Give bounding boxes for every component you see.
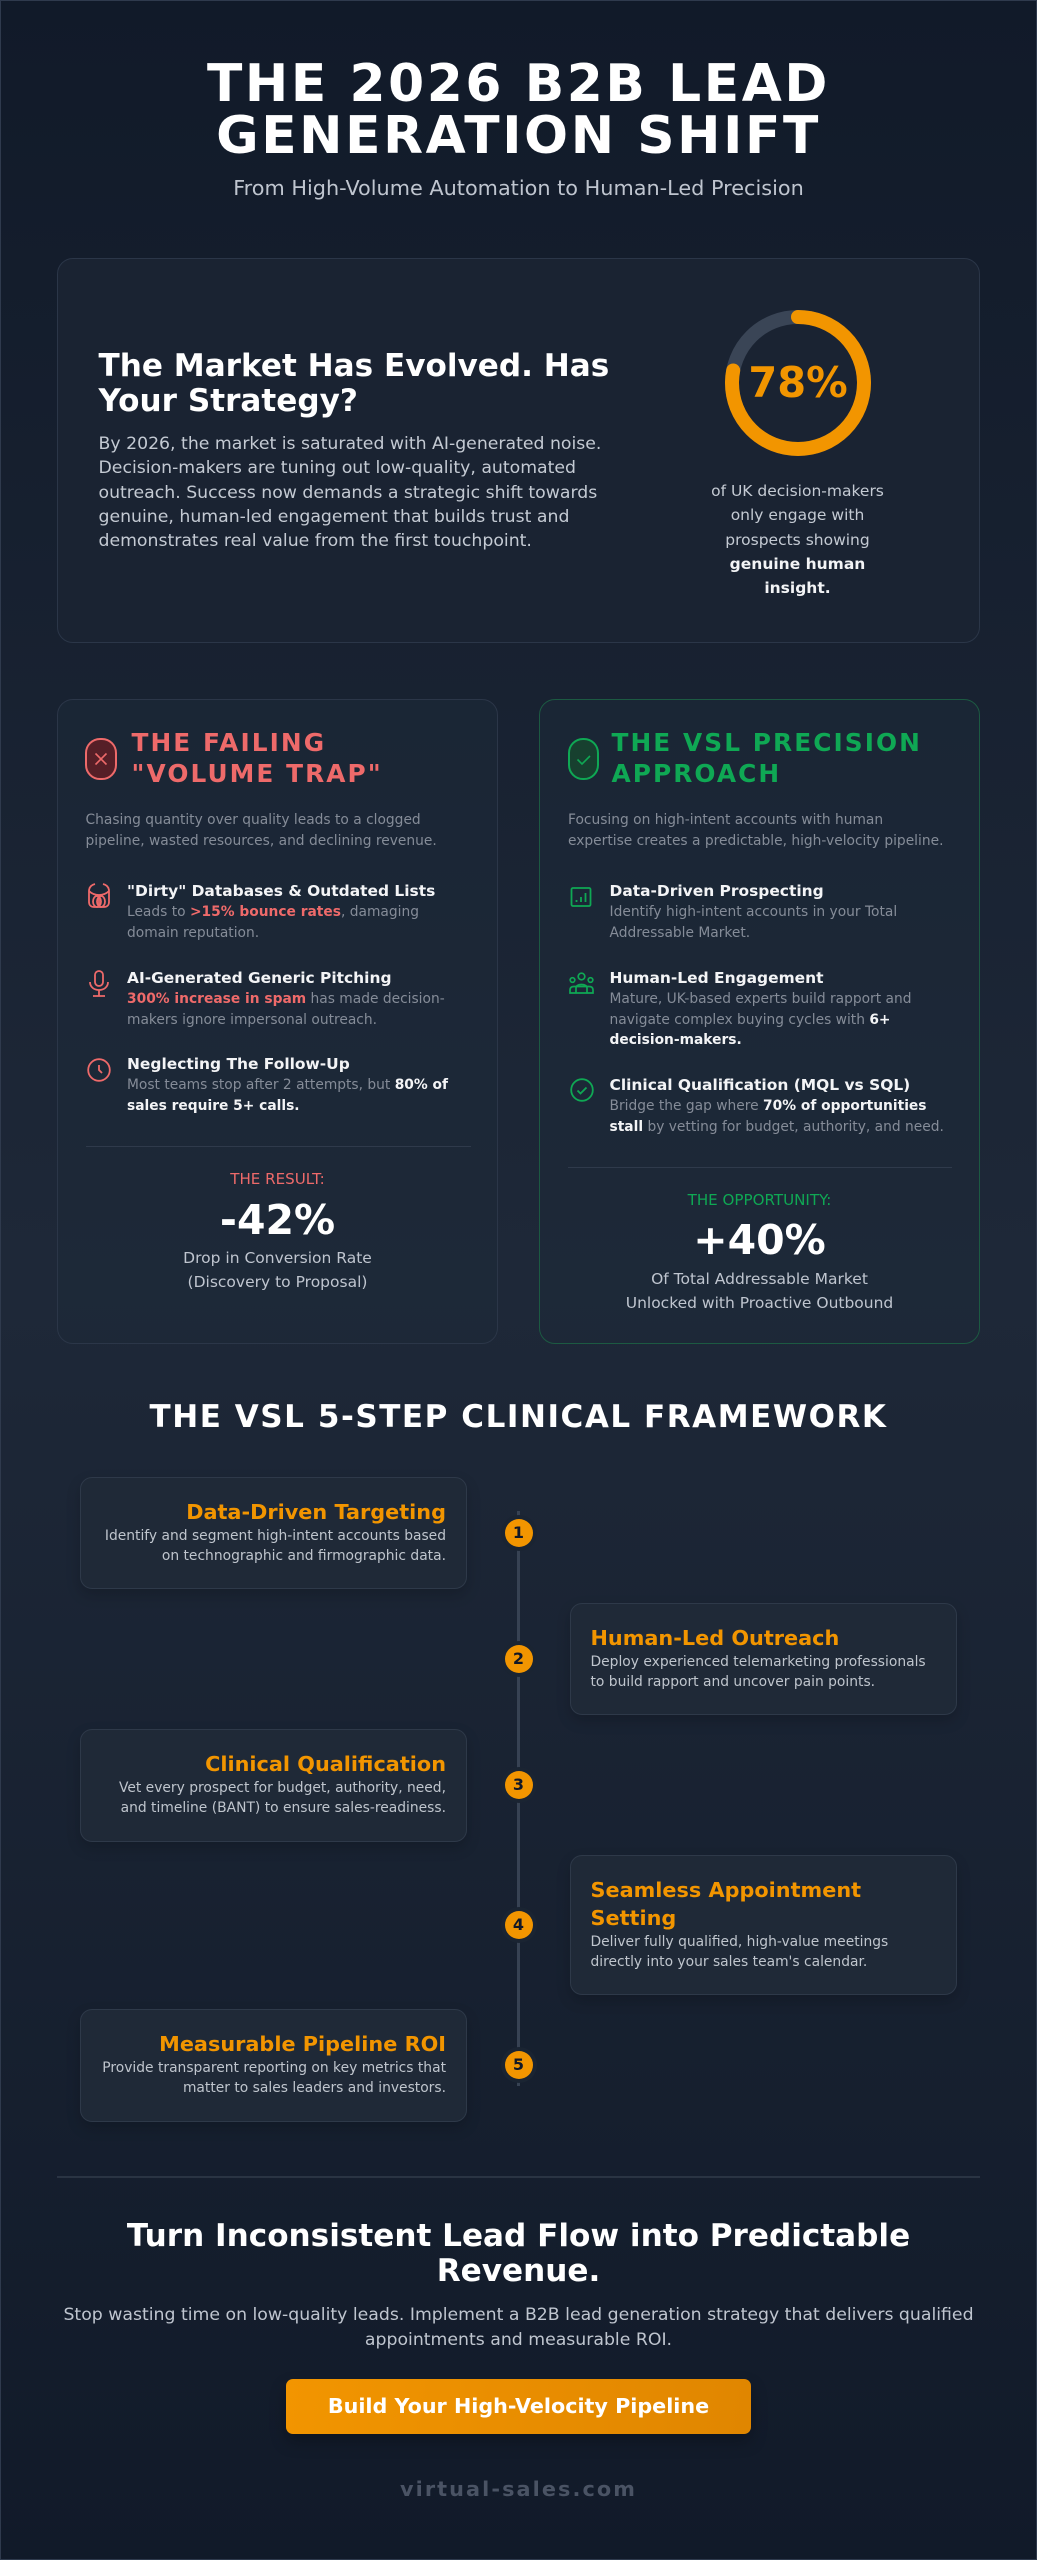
item: prospecting: Addressable Market. bbox=[610, 925, 750, 941]
step card 4 bbox=[570, 1854, 956, 1994]
opportunity label: THE OPPORTUNITY: bbox=[688, 1191, 831, 1209]
item: ai pitching: AI-Generated Generic Pitching bbox=[127, 969, 392, 987]
panel: market evolved bbox=[57, 258, 980, 643]
step number 4 bbox=[504, 1911, 532, 1939]
item: follow up: Most teams stop after 2 attempts, but 80% of bbox=[127, 1077, 448, 1093]
item: prospecting: Data-Driven Prospecting bbox=[610, 882, 824, 900]
step card 5: Measurable Pipeline ROI bbox=[159, 2032, 446, 2056]
failing heading: THE FAILING bbox=[132, 728, 326, 757]
step number 4: 4 bbox=[513, 1915, 524, 1934]
precision heading bbox=[612, 728, 922, 788]
step card 2: to build rapport and uncover pain points. bbox=[590, 1674, 875, 1690]
item: ai pitching bbox=[127, 969, 445, 1028]
step card 1: Identify and segment high-intent accounts based bbox=[105, 1528, 446, 1544]
opportunity value: +40% bbox=[693, 1216, 826, 1264]
failing heading bbox=[132, 728, 383, 788]
item: engagement: Mature, UK-based experts build rapport and bbox=[610, 991, 911, 1007]
item: engagement: decision-makers. bbox=[610, 1032, 742, 1048]
item: qualification: Clinical Qualification (MQL vs SQL) bbox=[610, 1076, 910, 1094]
footer divider bbox=[57, 2176, 980, 2178]
step card 2: Deploy experienced telemarketing professionals bbox=[590, 1654, 926, 1670]
step number 5: 5 bbox=[513, 2055, 524, 2074]
opportunity divider bbox=[568, 1167, 952, 1168]
step number 3 bbox=[504, 1771, 532, 1799]
subtitle: From High-Volume Automation to Human-Led Precision bbox=[233, 176, 804, 200]
result label: THE RESULT: bbox=[230, 1170, 325, 1188]
step card 1 bbox=[80, 1476, 467, 1588]
step number 3: 3 bbox=[513, 1775, 524, 1794]
item: dirty databases: "Dirty" Databases & Outdated Lists bbox=[127, 882, 435, 900]
cta heading bbox=[127, 2218, 910, 2289]
timeline line bbox=[517, 1511, 520, 2086]
donut caption: prospects showing bbox=[725, 531, 870, 549]
item: ai pitching: makers ignore impersonal outreach. bbox=[127, 1012, 377, 1028]
item: qualification: stall by vetting for budget, authority, and need. bbox=[610, 1119, 944, 1135]
item: engagement: navigate complex buying cycles with 6+ bbox=[610, 1012, 890, 1028]
hero body text: genuine, human-led engagement that builds trust and bbox=[98, 507, 569, 527]
hero heading bbox=[98, 348, 609, 419]
cta button: Build Your High-Velocity Pipeline bbox=[328, 2394, 709, 2418]
step card 3 bbox=[80, 1728, 467, 1842]
step card 1: on technographic and firmographic data. bbox=[162, 1548, 446, 1564]
opportunity caption: Of Total Addressable Market bbox=[651, 1270, 868, 1288]
icon: clock bbox=[87, 1058, 111, 1082]
item: follow up bbox=[127, 1055, 448, 1114]
item: dirty databases bbox=[127, 882, 435, 941]
donut caption: genuine human bbox=[730, 555, 865, 573]
cta text: appointments and measurable ROI. bbox=[365, 2330, 672, 2350]
cta heading: Turn Inconsistent Lead Flow into Predictable bbox=[127, 2218, 910, 2254]
precision intro: expertise creates a predictable, high-velocity pipeline. bbox=[568, 833, 943, 849]
icon: chart bbox=[570, 887, 592, 907]
donut caption: of UK decision-makers bbox=[711, 482, 884, 500]
item: engagement bbox=[610, 969, 911, 1048]
cta button bbox=[286, 2378, 751, 2434]
failing intro: pipeline, wasted resources, and declining revenue. bbox=[86, 833, 437, 849]
opportunity caption bbox=[626, 1270, 893, 1312]
hero body text: demonstrates real value from the first touchpoint. bbox=[98, 531, 532, 551]
item: follow up: sales require 5+ calls. bbox=[127, 1098, 300, 1114]
step number 2 bbox=[504, 1644, 532, 1672]
item: follow up: Neglecting The Follow-Up bbox=[127, 1055, 350, 1073]
step card 5: Provide transparent reporting on key metrics that bbox=[102, 2060, 446, 2076]
result caption: (Discovery to Proposal) bbox=[188, 1273, 367, 1291]
step number 5 bbox=[504, 2051, 532, 2079]
item: ai pitching: 300% increase in spam has made decision- bbox=[127, 991, 445, 1007]
hero body text: Decision-makers are tuning out low-quality, automated bbox=[98, 458, 576, 478]
failing intro: Chasing quantity over quality leads to a clogged bbox=[86, 812, 421, 828]
step card 5: matter to sales leaders and investors. bbox=[183, 2080, 446, 2096]
item: dirty databases: domain reputation. bbox=[127, 925, 259, 941]
step card 2: Human-Led Outreach bbox=[590, 1626, 839, 1650]
item: engagement: Human-Led Engagement bbox=[610, 969, 824, 987]
result caption bbox=[183, 1249, 372, 1291]
failing intro bbox=[86, 812, 437, 849]
donut caption bbox=[711, 482, 884, 597]
icon: x badge bbox=[85, 738, 117, 780]
item: prospecting: Identify high-intent accounts in your Total bbox=[610, 904, 897, 920]
item: prospecting bbox=[610, 882, 897, 941]
opportunity caption: Unlocked with Proactive Outbound bbox=[626, 1294, 893, 1312]
step card 1: Data-Driven Targeting bbox=[186, 1500, 446, 1524]
icon: check badge bbox=[568, 738, 599, 780]
failing heading: "VOLUME TRAP" bbox=[132, 759, 383, 788]
precision heading: THE VSL PRECISION bbox=[612, 728, 922, 757]
donut chart: 78%: 78% bbox=[748, 358, 847, 407]
cta text bbox=[63, 2305, 974, 2350]
step number 1: 1 bbox=[513, 1522, 524, 1542]
donut chart: 78% bbox=[725, 310, 871, 456]
hero heading: The Market Has Evolved. Has bbox=[98, 348, 609, 384]
hero body text: By 2026, the market is saturated with AI-generated noise. bbox=[98, 434, 601, 454]
hero heading: Your Strategy? bbox=[98, 383, 358, 419]
framework heading: THE VSL 5-STEP CLINICAL FRAMEWORK bbox=[150, 1399, 887, 1435]
hero body text bbox=[98, 434, 601, 551]
title: THE 2026 B2B LEAD bbox=[207, 54, 830, 114]
website: virtual-sales.com bbox=[400, 2477, 637, 2501]
icon: database bbox=[88, 883, 110, 908]
step card 3: Clinical Qualification bbox=[205, 1752, 446, 1776]
step card 4: directly into your sales team's calendar. bbox=[590, 1954, 867, 1970]
panel: failing volume trap bbox=[57, 698, 498, 1344]
step card 3: Vet every prospect for budget, authority, need, bbox=[119, 1780, 446, 1796]
step card 4: Setting bbox=[590, 1906, 676, 1930]
result divider bbox=[86, 1146, 470, 1147]
icon: check circle bbox=[570, 1078, 594, 1102]
donut caption: insight. bbox=[764, 579, 831, 597]
result caption: Drop in Conversion Rate bbox=[183, 1249, 372, 1267]
precision heading: APPROACH bbox=[612, 759, 781, 788]
step card 4: Seamless Appointment bbox=[590, 1878, 861, 1902]
step card 3: and timeline (BANT) to ensure sales-readiness. bbox=[121, 1800, 446, 1816]
cta text: Stop wasting time on low-quality leads. Implement a B2B lead generation strategy that delivers qualified bbox=[63, 2305, 974, 2325]
cta heading: Revenue. bbox=[437, 2253, 600, 2289]
precision intro bbox=[568, 812, 943, 849]
title: GENERATION SHIFT bbox=[216, 106, 821, 166]
hero body text: outreach. Success now demands a strategic shift towards bbox=[98, 483, 597, 503]
precision intro: Focusing on high-intent accounts with human bbox=[568, 812, 883, 828]
item: dirty databases: Leads to >15% bounce rates, damaging bbox=[127, 904, 419, 920]
step number 2: 2 bbox=[513, 1648, 524, 1668]
step card 2 bbox=[570, 1602, 956, 1714]
step card 4: Deliver fully qualified, high-value meetings bbox=[590, 1934, 888, 1950]
item: qualification bbox=[610, 1076, 944, 1135]
icon: microphone bbox=[89, 970, 109, 997]
title bbox=[207, 54, 830, 166]
result value: -42% bbox=[220, 1196, 335, 1244]
step card 5 bbox=[80, 2008, 467, 2122]
item: qualification: Bridge the gap where 70% of opportunities bbox=[610, 1098, 927, 1114]
donut caption: only engage with bbox=[731, 506, 864, 524]
panel: precision approach bbox=[539, 698, 980, 1344]
icon: people bbox=[569, 972, 594, 994]
step number 1 bbox=[504, 1518, 532, 1546]
